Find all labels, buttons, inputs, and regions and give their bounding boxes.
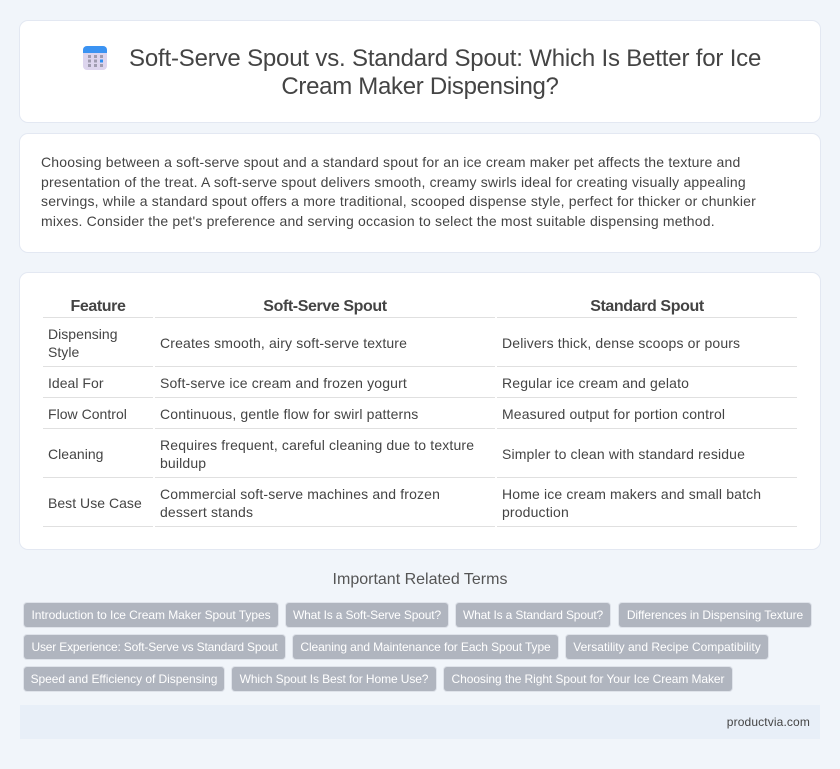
- tag: [293, 635, 558, 659]
- cell: [160, 437, 474, 471]
- tag: [444, 667, 732, 691]
- icon: calendar grid: [83, 46, 107, 70]
- cell: production: [502, 504, 569, 520]
- tag: [232, 667, 436, 691]
- cell: Soft-serve ice cream and frozen yogurt: [160, 375, 407, 391]
- cell: Commercial soft-serve machines and frozen: [160, 486, 440, 502]
- tag: Speed and Efficiency of Dispensing: [31, 672, 217, 686]
- tag group: related terms: [23, 602, 812, 692]
- heading: Important Related Terms: Important Related Terms: [333, 571, 507, 588]
- intro line 3: servings, while a standard spout offers a more traditional, scooped dispense style, perfect for thicker or chunkier: [41, 193, 756, 209]
- row: Cleaning: Cleaning: [48, 446, 104, 462]
- row: Ideal For: Ideal For: [48, 375, 104, 391]
- cell: Home ice cream makers and small batch: [502, 486, 761, 502]
- tag: [24, 603, 278, 627]
- tag: [24, 667, 224, 691]
- tag: Introduction to Ice Cream Maker Spout Types: [31, 608, 271, 622]
- table header: Feature: Feature: [70, 298, 126, 315]
- row: Best Use Case: Best Use Case: [48, 495, 142, 511]
- cell: [160, 486, 440, 520]
- tag: [24, 635, 285, 659]
- tag: Choosing the Right Spout for Your Ice Cream Maker: [452, 672, 724, 686]
- tag: Cleaning and Maintenance for Each Spout Type: [300, 640, 551, 654]
- tag: [566, 635, 768, 659]
- cell: Continuous, gentle flow for swirl patterns: [160, 406, 418, 422]
- row: Flow Control: Flow Control: [48, 406, 127, 422]
- tag: Versatility and Recipe Compatibility: [573, 640, 761, 654]
- row: Dispensing Style: Dispensing: [48, 326, 118, 342]
- cell: Creates smooth, airy soft-serve texture: [160, 335, 407, 351]
- panel: title header: [20, 21, 820, 122]
- cell: dessert stands: [160, 504, 253, 520]
- cell: [502, 486, 761, 520]
- cell: Simpler to clean with standard residue: [502, 446, 745, 462]
- tag: What Is a Standard Spout?: [463, 608, 603, 622]
- tag: [456, 603, 610, 627]
- tag: Which Spout Is Best for Home Use?: [240, 672, 428, 686]
- tag: What Is a Soft-Serve Spout?: [293, 608, 441, 622]
- footer bar: [20, 705, 820, 739]
- title line 1: Soft-Serve Spout vs. Standard Spout: Which Is Better for Ice: [129, 45, 761, 72]
- intro line 1: Choosing between a soft-serve spout and a standard spout for an ice cream maker pet affects the texture and: [41, 154, 740, 170]
- cell: Delivers thick, dense scoops or pours: [502, 335, 740, 351]
- panel: comparison table: [20, 273, 820, 549]
- row: Dispensing Style: [48, 326, 118, 360]
- cell: Regular ice cream and gelato: [502, 375, 689, 391]
- panel: introduction text: [20, 134, 820, 252]
- tag: Differences in Dispensing Texture: [627, 608, 803, 622]
- table header: Standard Spout: Standard Spout: [590, 298, 704, 315]
- title line 2: Cream Maker Dispensing?: [281, 73, 559, 100]
- footer brand: productvia.com: [727, 715, 810, 729]
- cell: Measured output for portion control: [502, 406, 725, 422]
- cell: buildup: [160, 455, 206, 471]
- row: Dispensing Style: Style: [48, 344, 79, 360]
- tag: [286, 603, 448, 627]
- cell: Requires frequent, careful cleaning due to texture: [160, 437, 474, 453]
- intro line 4: mixes. Consider the pet's preference and serving occasion to select the most suitable dispensing method.: [41, 213, 715, 229]
- tag: [619, 603, 811, 627]
- tag: User Experience: Soft-Serve vs Standard Spout: [31, 640, 278, 654]
- intro line 2: presentation of the treat. A soft-serve spout delivers smooth, creamy swirls ideal for creating visually appealing: [41, 174, 746, 190]
- table header: Soft-Serve Spout: Soft-Serve Spout: [263, 298, 387, 315]
